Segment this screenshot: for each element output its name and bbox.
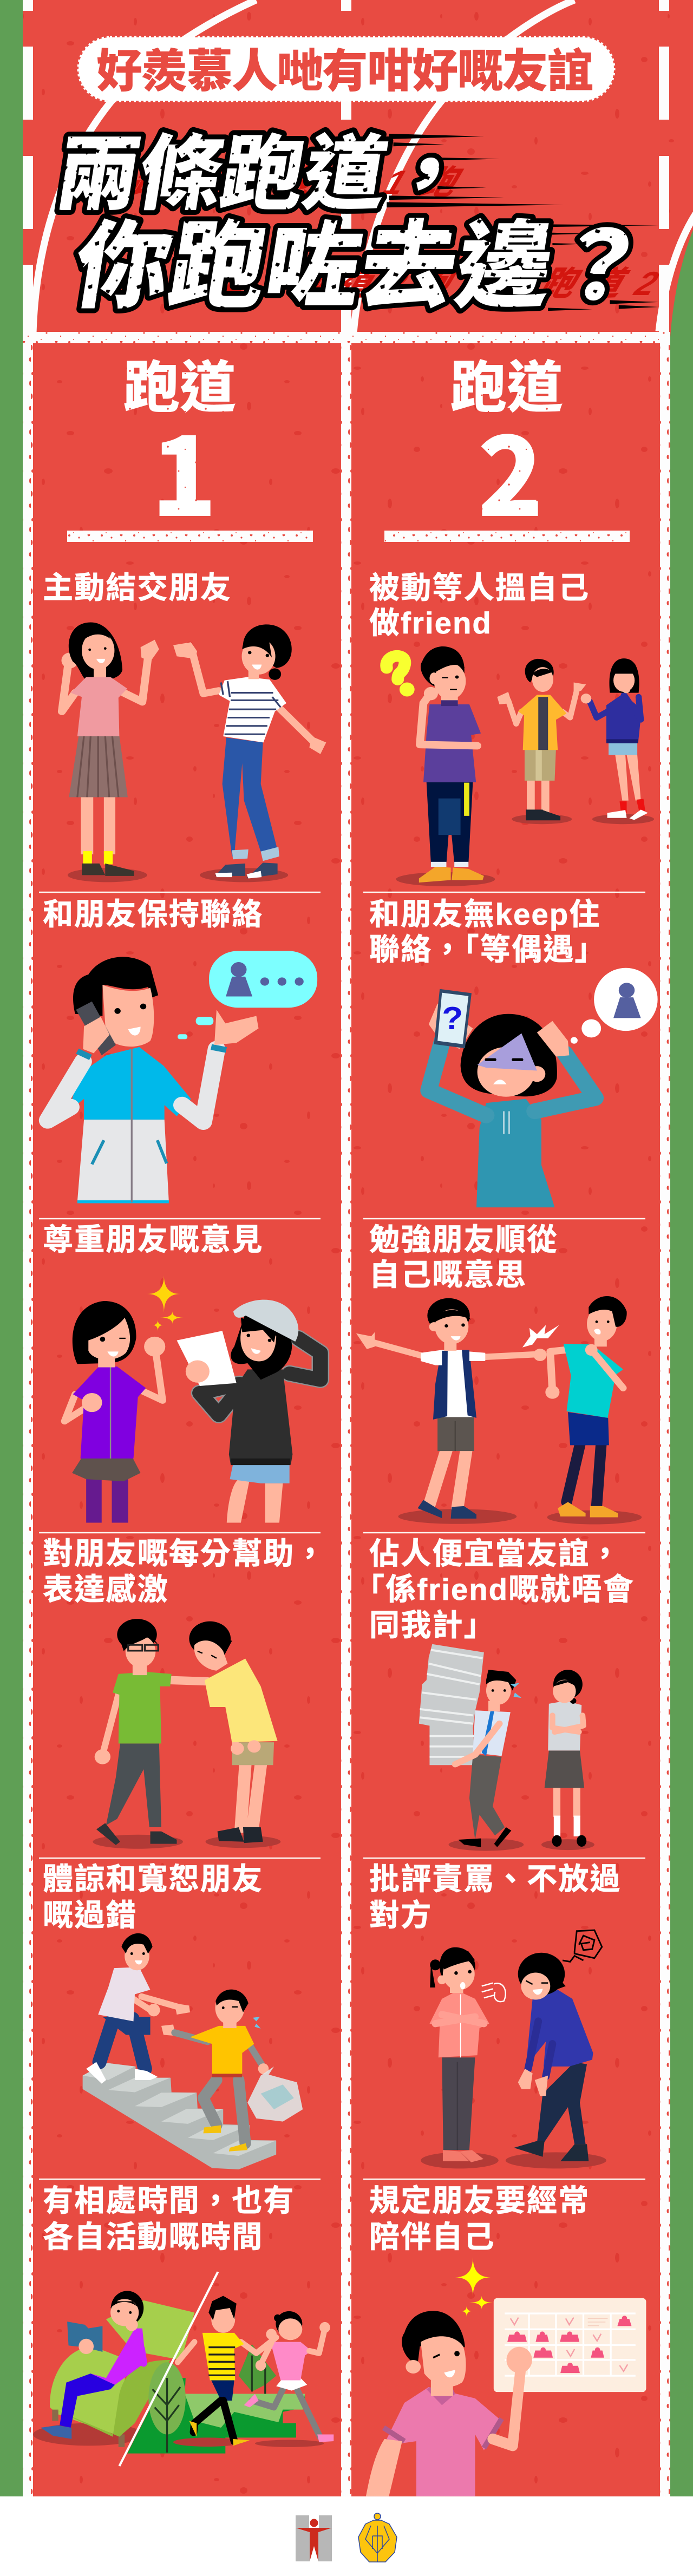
row headings: 做friend bbox=[369, 606, 492, 640]
row headings bbox=[43, 571, 635, 2254]
row headings: 有相處時間，也有 bbox=[43, 2183, 295, 2218]
scene: forgiving a friend on stairs bbox=[83, 1933, 303, 2169]
red ghost text: 跑道2跑道2跑道2跑道2 bbox=[158, 265, 667, 303]
subtitle pill: 好羨慕人哋有咁好嘅友誼 bbox=[96, 46, 593, 97]
lane 2 header: 2 bbox=[478, 390, 544, 547]
red ghost text bbox=[123, 164, 667, 303]
scene: keeping in touch by phone bbox=[48, 951, 317, 1203]
scene: waiting for friends bbox=[387, 646, 654, 886]
row headings: 對朋友嘅每分幫助， bbox=[43, 1537, 326, 1571]
row headings: 主動結交朋友 bbox=[43, 571, 232, 605]
row headings: 勉強朋友順從 bbox=[369, 1222, 558, 1257]
lane 1 header bbox=[67, 357, 313, 547]
row headings: 嘅過錯 bbox=[43, 1898, 138, 1932]
red ghost text: 跑道1跑道1跑 bbox=[123, 164, 469, 201]
row headings: 被動等人搵自己 bbox=[369, 571, 590, 605]
speed lines bbox=[387, 134, 658, 311]
main title: 你跑咗去邊？ bbox=[67, 213, 656, 320]
row headings: 對方 bbox=[369, 1898, 432, 1932]
row headings: 聯絡，「等偶遇」 bbox=[369, 932, 606, 966]
scene: demanding constant company bbox=[366, 2257, 646, 2496]
main title bbox=[50, 129, 667, 320]
scene: forcing a friend to obey bbox=[356, 1296, 642, 1525]
row headings: 各自活動嘅時間 bbox=[43, 2220, 263, 2254]
row headings: 體諒和寬恕朋友 bbox=[43, 1862, 263, 1896]
scene: no contact, waiting for chance: ? bbox=[442, 1001, 463, 1037]
row headings: 規定朋友要經常 bbox=[369, 2183, 590, 2218]
row headings: 「係friend嘅就唔會 bbox=[354, 1572, 635, 1606]
row headings: 和朋友無keep住 bbox=[369, 897, 600, 931]
lane 2 header: 跑道 bbox=[450, 357, 563, 420]
lane 1 header: 跑道 bbox=[123, 357, 236, 420]
lane 1 header: 1 bbox=[151, 390, 217, 547]
row headings: 自己嘅意思 bbox=[369, 1258, 527, 1292]
row headings: 和朋友保持聯絡 bbox=[43, 897, 263, 931]
scene: respecting a friend's opinion bbox=[64, 1276, 321, 1522]
scene: no contact, waiting for chance bbox=[429, 968, 658, 1207]
row headings: 批評責罵、不放過 bbox=[369, 1862, 622, 1896]
scene: paper pile carried for friend bbox=[419, 1644, 594, 1851]
row headings: 同我計」 bbox=[369, 1608, 495, 1642]
scene: criticising and scolding bbox=[421, 1930, 606, 2168]
row headings: 尊重朋友嘅意見 bbox=[43, 1222, 263, 1257]
scene: two friends chatting bbox=[61, 622, 326, 882]
row headings: 表達感激 bbox=[43, 1572, 169, 1606]
scene: thanking a friend for help bbox=[93, 1619, 280, 1849]
lane 2 header bbox=[384, 357, 630, 547]
logo: charity hands bbox=[358, 2513, 397, 2562]
row headings: 陪伴自己 bbox=[369, 2220, 495, 2254]
logo: Hong Kong government department bbox=[296, 2515, 332, 2561]
row headings: 佔人便宜當友誼， bbox=[369, 1537, 622, 1571]
main title: 兩條跑道， bbox=[50, 129, 476, 220]
scene: time together, time apart bbox=[33, 2272, 334, 2466]
